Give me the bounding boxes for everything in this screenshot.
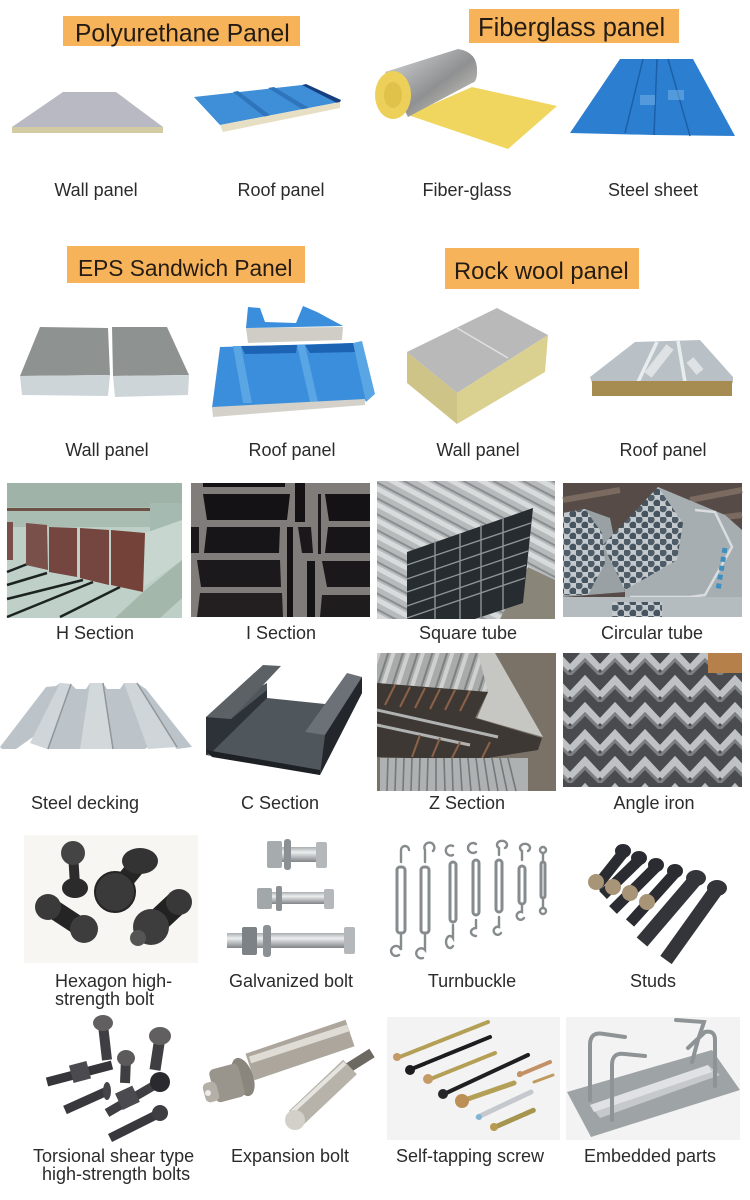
label: C Section <box>241 793 319 813</box>
image: fiber-glass roll <box>375 49 557 149</box>
image: H section steel photo <box>7 483 182 618</box>
label: Steel decking <box>31 793 139 813</box>
image: C section channel <box>206 665 362 775</box>
image: shear studs <box>588 844 727 960</box>
label: Expansion bolt <box>231 1146 349 1166</box>
label: Roof panel <box>248 440 336 460</box>
label: Galvanized bolt <box>229 971 353 991</box>
label: Roof panel <box>619 440 707 460</box>
label: Steel sheet <box>608 180 698 200</box>
image: self-tapping screws <box>387 1017 560 1140</box>
label: strength bolt <box>55 989 154 1009</box>
panel: H section <box>7 483 182 643</box>
image: galvanized bolts <box>227 839 355 957</box>
image: EPS wall panel <box>20 327 189 397</box>
image: square tube photo <box>377 481 555 619</box>
image: expansion bolts <box>202 1028 372 1130</box>
image: EPS roof panel <box>212 306 375 417</box>
heading: Fiberglass panel: Fiberglass panel <box>478 14 665 42</box>
panel: self-tapping screw <box>387 1017 560 1166</box>
panel: rock wool panel <box>407 248 733 460</box>
heading: EPS Sandwich Panel <box>67 246 305 283</box>
image: black bolts <box>24 835 198 963</box>
label: Wall panel <box>65 440 149 460</box>
label: Wall panel <box>54 180 138 200</box>
image: Z section photo <box>377 653 556 791</box>
label: Square tube <box>419 623 517 643</box>
label: Circular tube <box>601 623 703 643</box>
label: Fiber-glass <box>422 180 512 200</box>
panel: I section <box>191 483 370 643</box>
label: Torsional shear type <box>33 1146 194 1166</box>
image: I section steel photo <box>191 483 370 617</box>
image: torsional shear bolts <box>47 1015 171 1138</box>
panel: studs <box>588 844 727 991</box>
panel: expansion bolt <box>202 1028 372 1166</box>
label: H Section <box>56 623 134 643</box>
image: polyurethane wall panel <box>12 92 163 133</box>
panel: square tube <box>377 481 555 643</box>
image: angle iron photo <box>563 653 742 787</box>
panel: hexagon high-strength bolt <box>24 835 198 1009</box>
label: high-strength bolts <box>42 1164 190 1184</box>
panel: C section <box>206 665 362 813</box>
panel: angle iron <box>563 653 742 813</box>
panel: EPS sandwich panel <box>20 246 375 460</box>
label: Angle iron <box>613 793 695 813</box>
heading: Rock wool panel <box>445 248 639 289</box>
panel: torsional shear bolts <box>33 1015 194 1184</box>
panel: fiberglass panel <box>375 9 735 200</box>
panel: turnbuckle <box>391 841 546 991</box>
heading: Polyurethane Panel: Polyurethane Panel <box>75 20 290 48</box>
panel: Z section <box>377 653 556 813</box>
label <box>55 971 172 1009</box>
image: rock wool wall panel <box>407 308 548 424</box>
label: Self-tapping screw <box>396 1146 545 1166</box>
image: embedded plate with rebars <box>566 1017 740 1140</box>
image: rock wool roof panel <box>590 340 733 396</box>
panel: polyurethane panel <box>12 16 341 200</box>
label: Turnbuckle <box>428 971 516 991</box>
image: circular tube photo <box>563 483 742 617</box>
heading: EPS Sandwich Panel: EPS Sandwich Panel <box>78 255 292 281</box>
image: steel decking <box>0 683 192 749</box>
label: Embedded parts <box>584 1146 716 1166</box>
label: Wall panel <box>436 440 520 460</box>
image: turnbuckles <box>391 841 546 958</box>
heading: Rock wool panel: Rock wool panel <box>454 258 629 285</box>
panel: embedded parts <box>566 1017 740 1166</box>
label: Z Section <box>429 793 505 813</box>
image: polyurethane roof panel <box>194 84 341 132</box>
label: Hexagon high- <box>55 971 172 991</box>
label: I Section <box>246 623 316 643</box>
image: blue steel sheet <box>570 59 735 136</box>
label <box>33 1146 194 1184</box>
panel: steel decking <box>0 683 192 813</box>
panel: galvanized bolt <box>227 839 355 991</box>
panel: circular tube <box>563 483 742 643</box>
label: Studs <box>630 971 676 991</box>
label: Roof panel <box>237 180 325 200</box>
